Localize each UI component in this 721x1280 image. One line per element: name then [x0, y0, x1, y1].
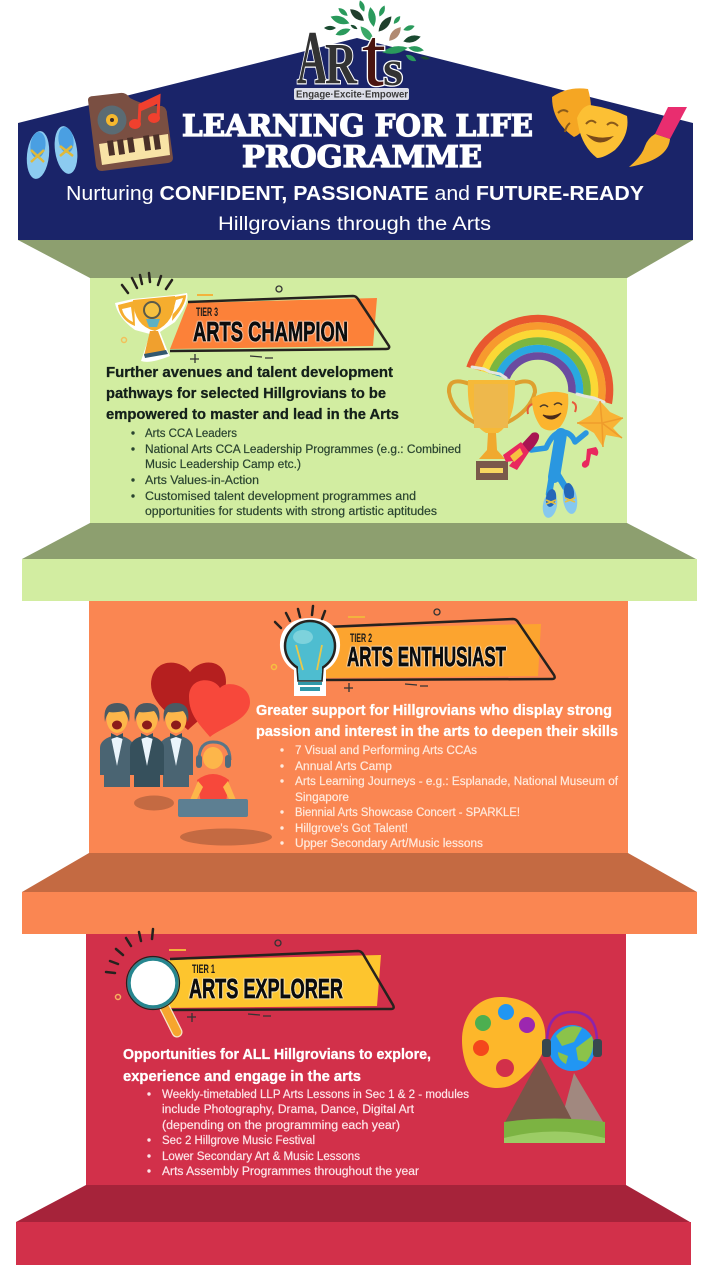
tier 3 banner: ARTS CHAMPION: [193, 316, 348, 347]
list: tier 1 programmes: Arts Assembly Programmes throughout the year: [162, 1166, 419, 1178]
tier 3 banner: TIER 3: [196, 305, 218, 319]
tier 1 banner: TIER 1: [192, 962, 215, 976]
heading: tier 3 description: Further avenues and talent development: [106, 365, 393, 381]
shadows under performers: [134, 796, 272, 846]
heading: tier 2 description: Greater support for Hillgrovians who display strong: [256, 703, 612, 719]
list: tier 3 programmes: Arts Values-in-Action: [145, 475, 259, 487]
icon: character with mask, brush and star: [503, 392, 623, 519]
logo wordmark: A: [297, 16, 328, 100]
list: tier 2 programmes: Annual Arts Camp: [295, 761, 392, 773]
list: tier 1 programmes: Sec 2 Hillgrove Music Festival: [162, 1135, 315, 1147]
heading: tier 1 description: [123, 1047, 431, 1085]
heading: tier 1 description: experience and engage in the arts: [123, 1069, 361, 1085]
icon: paint brush: [629, 107, 687, 167]
icon: theatre masks: [552, 88, 628, 158]
tier 2 floor: [22, 853, 697, 934]
panel: tier 1 arts explorer: [86, 929, 626, 1185]
list: tier 1 programmes: Weekly-timetabled LLP Arts Lessons in Sec 1 & 2 - modules: [162, 1089, 469, 1101]
list: tier 2 programmes: Upper Secondary Art/Music lessons: [295, 838, 483, 850]
icon: rainbow: [466, 314, 614, 404]
tier 1 banner: ARTS EXPLORER: [189, 973, 343, 1004]
tier 2 banner: TIER 2: [350, 631, 372, 645]
logo wordmark: [297, 11, 403, 104]
heading: tier 2 description: passion and interest in the arts to deepen their skills: [256, 724, 618, 740]
list: tier 1 programmes: Lower Secondary Art & Music Lessons: [162, 1151, 360, 1163]
list: tier 3 programmes: opportunities for students with strong artistic aptitudes: [145, 506, 437, 518]
logo wordmark: R: [325, 31, 358, 96]
tier 1 floor: [16, 1185, 691, 1265]
header roof panel: [18, 38, 693, 240]
icon: three singers: [100, 703, 193, 787]
list: tier 3 programmes: National Arts CCA Leadership Programmes (e.g.: Combined: [145, 444, 461, 456]
icon: magnifying glass: [106, 929, 180, 1032]
list: tier 3 programmes: Customised talent development programmes and: [145, 491, 416, 503]
title: LEARNING FOR LIFE: [182, 109, 533, 144]
logo wordmark: s: [383, 40, 403, 96]
tier 3 banner: [170, 286, 389, 363]
list: tier 1 programmes: include Photography, Drama, Dance, Digital Art: [162, 1104, 415, 1116]
tier 2 banner: ARTS ENTHUSIAST: [347, 641, 506, 672]
heading: tier 3 description: [106, 365, 399, 423]
logo: Arts tree: [294, 0, 430, 104]
list: tier 1 programmes: [147, 1089, 469, 1178]
tier 1 banner: [116, 940, 394, 1022]
title: PROGRAMME: [242, 140, 482, 175]
icon: hearts: [151, 663, 250, 737]
icon: palette: [462, 997, 545, 1088]
heading: tier 1 description: Opportunities for ALL Hillgrovians to explore,: [123, 1047, 431, 1063]
list: tier 2 programmes: Singapore: [295, 792, 349, 804]
list: tier 2 programmes: Hillgrove's Got Talent!: [295, 823, 408, 835]
heading: tier 2 description: [256, 703, 618, 740]
logo tagline: Engage·Excite·Empower: [296, 90, 408, 100]
subtitle: Hillgrovians through the Arts: [218, 214, 491, 235]
panel: tier 3 arts champion: [90, 273, 627, 523]
title: [182, 109, 533, 175]
icon: DJ at desk: [178, 742, 248, 817]
tier 2 banner: [272, 609, 555, 692]
list: tier 2 programmes: 7 Visual and Performing Arts CCAs: [295, 745, 477, 757]
icon: piano with vinyl and music note: [88, 93, 173, 171]
list: tier 2 programmes: Biennial Arts Showcase Concert - SPARKLE!: [295, 807, 520, 819]
tier 3 floor: [22, 523, 697, 601]
icon: globe with headphones: [542, 1012, 602, 1071]
list: tier 3 programmes: Arts CCA Leaders: [145, 428, 237, 440]
subtitle: Nurturing CONFIDENT, PASSIONATE and FUTURE-READY: [66, 183, 645, 205]
logo leaves: [324, 0, 430, 63]
list: tier 2 programmes: Arts Learning Journeys - e.g.: Esplanade, National Museum of: [295, 776, 619, 788]
icon: mountains: [504, 1058, 605, 1143]
icon: large trophy: [449, 380, 535, 480]
list: tier 1 programmes: (depending on the programming each year): [162, 1120, 400, 1132]
icon: small trophy: [115, 273, 188, 362]
list: tier 3 programmes: [131, 428, 461, 518]
list: tier 2 programmes: [280, 745, 619, 850]
logo wordmark: t: [362, 11, 386, 104]
ceiling of tier 3: [18, 240, 693, 278]
panel: tier 2 arts enthusiast: [89, 601, 628, 853]
subtitle: [66, 183, 645, 235]
icon: light bulb: [275, 606, 340, 696]
heading: tier 3 description: empowered to master and lead in the Arts: [106, 407, 399, 423]
icon: ballet shoes: [25, 125, 80, 180]
list: tier 3 programmes: Music Leadership Camp etc.): [145, 459, 301, 471]
heading: tier 3 description: pathways for selected Hillgrovians to be: [106, 386, 386, 402]
